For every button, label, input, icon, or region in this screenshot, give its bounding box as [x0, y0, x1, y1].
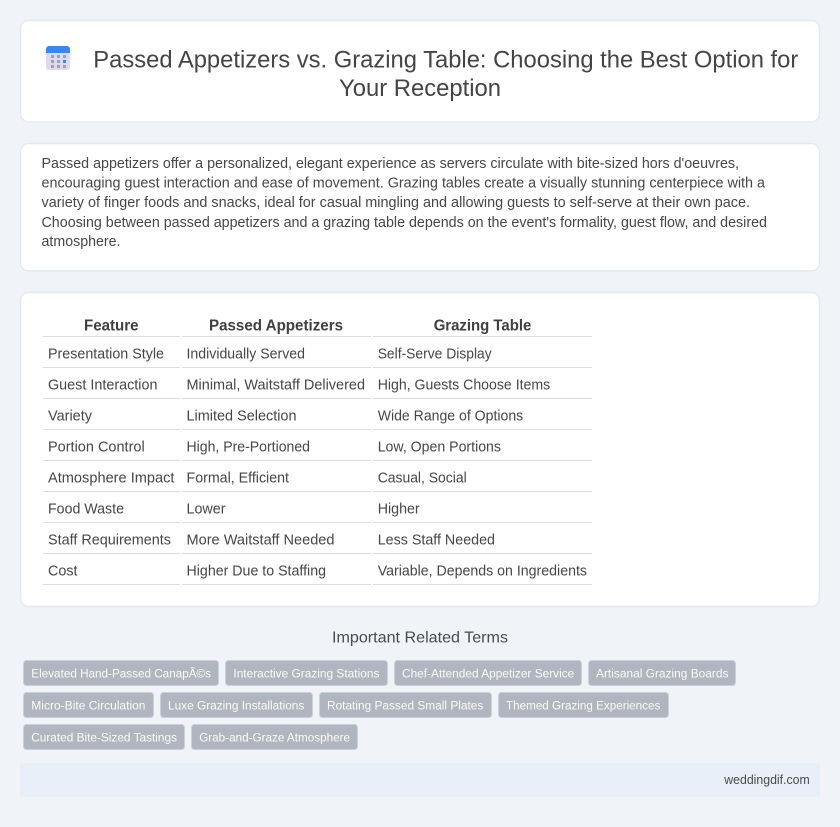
- footer: [20, 763, 820, 797]
- table header: Grazing Table: [434, 318, 531, 335]
- row: portion control: Portion Control: [48, 439, 145, 455]
- panel: title header: [20, 20, 820, 122]
- table header: Feature: [84, 318, 139, 335]
- row: cost: [48, 563, 587, 579]
- row: presentation style: Self-Serve Display: [378, 346, 492, 362]
- row: food waste: Lower: [186, 501, 226, 517]
- row: guest interaction: High, Guests Choose Items: [378, 377, 550, 393]
- title: Your Reception: [339, 75, 501, 102]
- row: food waste: Food Waste: [48, 501, 124, 517]
- tag: [498, 692, 668, 718]
- row: staff requirements: [48, 532, 495, 548]
- row: presentation style: [48, 346, 492, 362]
- row: cost: Cost: [48, 563, 78, 579]
- row: food waste: Higher: [378, 501, 420, 517]
- text block: introduction paragraph: Passed appetizers offer a personalized, elegant experience as servers circulate with bite-sized hors d'oeuvres,: [42, 156, 739, 172]
- row: guest interaction: Guest Interaction: [48, 377, 158, 393]
- row: cost: Higher Due to Staffing: [186, 563, 326, 579]
- row: staff requirements: More Waitstaff Needed: [186, 532, 334, 548]
- tag: Grab-and-Graze Atmosphere: [199, 730, 350, 744]
- tag: [394, 660, 582, 686]
- row: cost: Variable, Depends on Ingredients: [378, 563, 587, 579]
- row: atmosphere impact: Formal, Efficient: [186, 470, 289, 486]
- row: portion control: Low, Open Portions: [378, 439, 501, 455]
- row: variety: [48, 408, 523, 424]
- row: atmosphere impact: [48, 470, 467, 486]
- row: variety: Variety: [48, 408, 93, 424]
- row: staff requirements: Staff Requirements: [48, 532, 171, 548]
- tag: [588, 660, 736, 686]
- tag: Rotating Passed Small Plates: [327, 698, 483, 712]
- tag: Elevated Hand-Passed CanapÃ©s: [31, 666, 211, 680]
- tag: Luxe Grazing Installations: [168, 698, 304, 712]
- panel: introduction: [20, 144, 820, 271]
- tag: Curated Bite-Sized Tastings: [31, 730, 177, 744]
- tag: [192, 724, 358, 750]
- icon: calendar: [46, 46, 70, 70]
- row: staff requirements: Less Staff Needed: [378, 532, 495, 548]
- row: atmosphere impact: Atmosphere Impact: [48, 470, 174, 486]
- text block: introduction paragraph: encouraging guest interaction and ease of movement. Grazing tables create a visually stunning centerpiece with a: [42, 176, 766, 192]
- panel: comparison table: [20, 292, 820, 606]
- row: variety: Limited Selection: [186, 408, 296, 424]
- text block: introduction paragraph: variety of finger foods and snacks, ideal for casual mingling and allowing guests to self-serve at their own pace.: [42, 195, 750, 211]
- tag: Themed Grazing Experiences: [506, 698, 660, 712]
- tag: [24, 660, 218, 686]
- tag: Micro-Bite Circulation: [31, 698, 146, 712]
- row: guest interaction: [48, 377, 550, 393]
- row: food waste: [48, 501, 420, 517]
- row: portion control: High, Pre-Portioned: [186, 439, 310, 455]
- row: presentation style: Presentation Style: [48, 346, 164, 362]
- tag: Interactive Grazing Stations: [233, 666, 379, 680]
- tag: [24, 724, 184, 750]
- tag: [24, 692, 154, 718]
- row: atmosphere impact: Casual, Social: [378, 470, 467, 486]
- text block: introduction paragraph: [42, 156, 767, 250]
- footer: weddingdif.com: [723, 772, 810, 787]
- tag: [160, 692, 312, 718]
- text block: introduction paragraph: Choosing between passed appetizers and a grazing table depends on the event's formality, guest flow, and desired: [42, 215, 767, 231]
- table header: [84, 318, 531, 335]
- row: presentation style: Individually Served: [186, 346, 305, 362]
- tag: [320, 692, 492, 718]
- heading: important related terms: Important Related Terms: [332, 630, 508, 647]
- text block: introduction paragraph: atmosphere.: [42, 234, 120, 250]
- title: Passed Appetizers vs. Grazing Table: Choosing the Best Option for: [93, 46, 798, 73]
- tag: [226, 660, 388, 686]
- table header: Passed Appetizers: [209, 318, 343, 335]
- row: portion control: [48, 439, 501, 455]
- tags: related terms: [24, 660, 736, 750]
- title: [93, 46, 798, 102]
- tag: Artisanal Grazing Boards: [596, 666, 728, 680]
- row: variety: Wide Range of Options: [378, 408, 523, 424]
- tag: Chef-Attended Appetizer Service: [402, 666, 574, 680]
- row: guest interaction: Minimal, Waitstaff Delivered: [186, 377, 365, 393]
